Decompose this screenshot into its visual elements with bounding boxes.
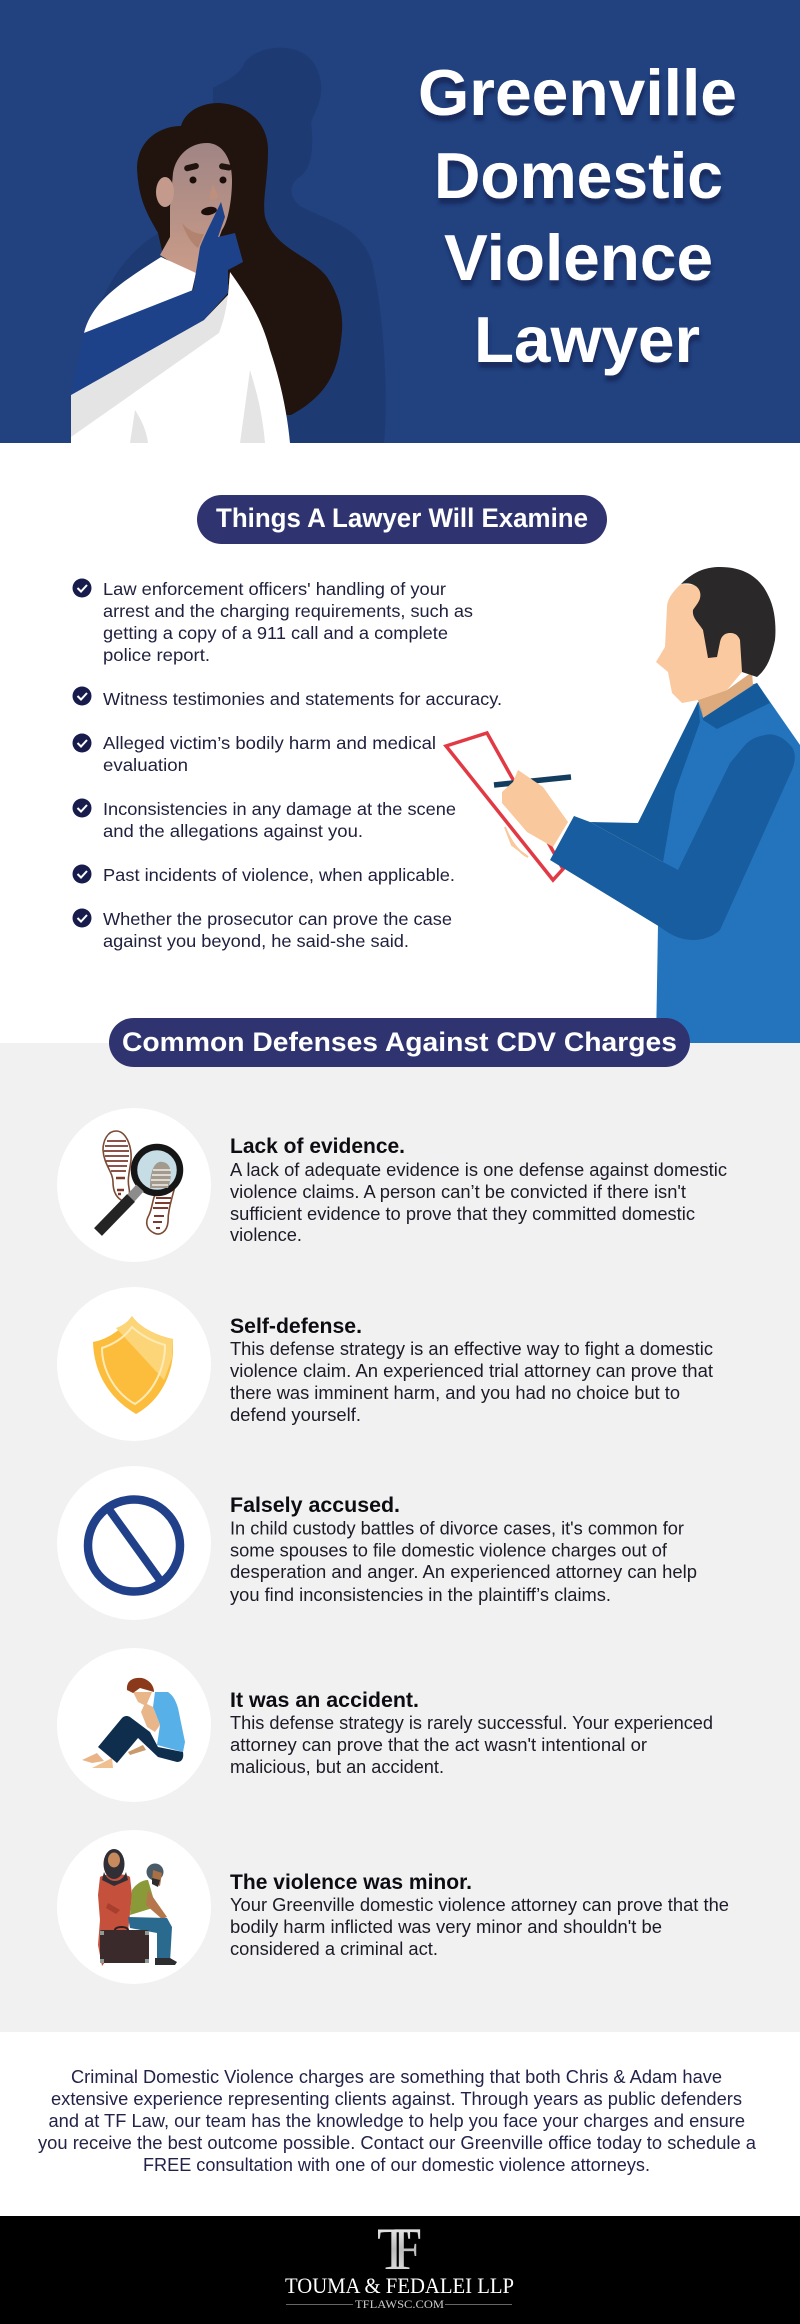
closing paragraph: you receive the best outcome possible. Contact our Greenville office today to schedule a — [38, 2133, 757, 2153]
list item 4: and the allegations against you. — [103, 821, 363, 841]
illustration: lawyer with clipboard — [446, 567, 800, 1043]
text: self-defense — [230, 1315, 713, 1425]
text: falsely accused: some spouses to file domestic violence charges out of — [230, 1540, 668, 1560]
list item 4 — [72, 798, 456, 841]
list item 1: arrest and the charging requirements, such as — [103, 601, 473, 621]
heading pill: things a lawyer will examine — [197, 495, 607, 544]
firm website: TFLAWSC.COM — [355, 2299, 444, 2311]
title: Domestic — [434, 139, 723, 212]
text: it was an accident: attorney can prove that the act wasn't intentional or — [230, 1735, 647, 1755]
heading pill: things a lawyer will examine: Things A Lawyer Will Examine — [216, 503, 588, 533]
defense: falsely accused — [57, 1466, 697, 1620]
closing paragraph: extensive experience representing clients against. Through years as public defenders — [51, 2089, 742, 2109]
text: the violence was minor: considered a criminal act. — [230, 1939, 438, 1959]
footer — [0, 2216, 800, 2324]
text: falsely accused: In child custody battles of divorce cases, it's common for — [230, 1518, 684, 1538]
list item 6: Whether the prosecutor can prove the case — [103, 909, 452, 929]
list item 3: evaluation — [103, 755, 188, 775]
heading pill: common defenses — [109, 1018, 690, 1067]
text: self-defense: violence claim. An experienced trial attorney can prove that — [230, 1361, 713, 1381]
defense: lack of evidence — [57, 1108, 727, 1262]
list item 4: Inconsistencies in any damage at the scene — [103, 799, 456, 819]
panel: common defenses — [0, 1018, 800, 2032]
list item 3: Alleged victim’s bodily harm and medical — [103, 733, 436, 753]
text: falsely accused: desperation and anger. An experienced attorney can help — [230, 1562, 697, 1582]
list item 1: getting a copy of a 911 call and a complete — [103, 623, 448, 643]
logo: TF monogram: T — [377, 2216, 411, 2282]
title: Greenville — [418, 56, 737, 129]
text: lack of evidence: violence claims. A person can’t be convicted if there isn't — [230, 1182, 686, 1202]
text: self-defense: there was imminent harm, and you had no choice but to — [230, 1383, 680, 1403]
list item 5: Past incidents of violence, when applicable. — [103, 865, 455, 885]
text: it was an accident: malicious, but an accident. — [230, 1757, 444, 1777]
text: lack of evidence: sufficient evidence to prove that they committed domestic — [230, 1204, 695, 1224]
text: self-defense: defend yourself. — [230, 1405, 361, 1425]
list item 1 — [72, 578, 473, 665]
text: the violence was minor: Your Greenville domestic violence attorney can prove that the — [230, 1895, 729, 1915]
text: falsely accused — [230, 1494, 697, 1605]
firm name: TOUMA & FEDALEI LLP — [285, 2273, 514, 2298]
text: it was an accident: It was an accident. — [230, 1689, 419, 1712]
closing paragraph: Criminal Domestic Violence charges are something that both Chris & Adam have — [71, 2067, 722, 2087]
closing paragraph: FREE consultation with one of our domestic violence attorneys. — [143, 2155, 650, 2175]
illustration: woman covering her mouth — [71, 103, 342, 443]
text: falsely accused: you find inconsistencies in the plaintiff’s claims. — [230, 1585, 611, 1605]
list item 1: police report. — [103, 645, 210, 665]
list item 6: against you beyond, he said-she said. — [103, 931, 409, 951]
text: self-defense: Self-defense. — [230, 1315, 362, 1338]
list item 2: Witness testimonies and statements for accuracy. — [103, 689, 502, 709]
panel: hero banner — [0, 0, 800, 443]
defense: it was an accident — [57, 1648, 713, 1802]
text: falsely accused: Falsely accused. — [230, 1494, 400, 1517]
text: the violence was minor: bodily harm inflicted was very minor and shouldn't be — [230, 1917, 662, 1937]
text: the violence was minor — [230, 1871, 729, 1959]
checklist — [72, 578, 502, 951]
list item 6 — [72, 908, 452, 951]
title: Lawyer — [474, 303, 700, 376]
icon: footprints and magnifying glass — [57, 1108, 211, 1262]
panel: things a lawyer will examine — [0, 443, 800, 1043]
icon: prohibition sign — [57, 1466, 211, 1620]
text: the violence was minor: The violence was minor. — [230, 1871, 472, 1894]
text: lack of evidence — [230, 1135, 727, 1245]
title: Violence — [444, 221, 713, 294]
text: lack of evidence: Lack of evidence. — [230, 1135, 405, 1158]
text: it was an accident: This defense strategy is rarely successful. Your experienced — [230, 1713, 713, 1733]
text: lack of evidence: violence. — [230, 1225, 302, 1245]
text: self-defense: This defense strategy is an effective way to fight a domestic — [230, 1339, 713, 1359]
icon: man sitting with head in hands — [57, 1648, 211, 1802]
text: it was an accident — [230, 1689, 713, 1777]
logo: TF monogram: F — [393, 2216, 422, 2282]
defense: the violence was minor — [57, 1830, 729, 1984]
closing paragraph: and at TF Law, our team has the knowledge to help you face your charges and ensure — [48, 2111, 745, 2131]
illustration: shadow figure — [90, 48, 386, 443]
list item 1: Law enforcement officers' handling of your — [103, 579, 446, 599]
closing paragraph — [0, 2032, 800, 2216]
heading pill: common defenses: Common Defenses Against CDV Charges — [122, 1027, 677, 1057]
title — [418, 56, 737, 376]
list item 3 — [72, 733, 436, 775]
defense: self-defense — [57, 1287, 713, 1441]
text: lack of evidence: A lack of adequate evidence is one defense against domestic — [230, 1160, 727, 1180]
icon: shield — [57, 1287, 211, 1441]
icon: couple with suitcase — [57, 1830, 211, 1984]
